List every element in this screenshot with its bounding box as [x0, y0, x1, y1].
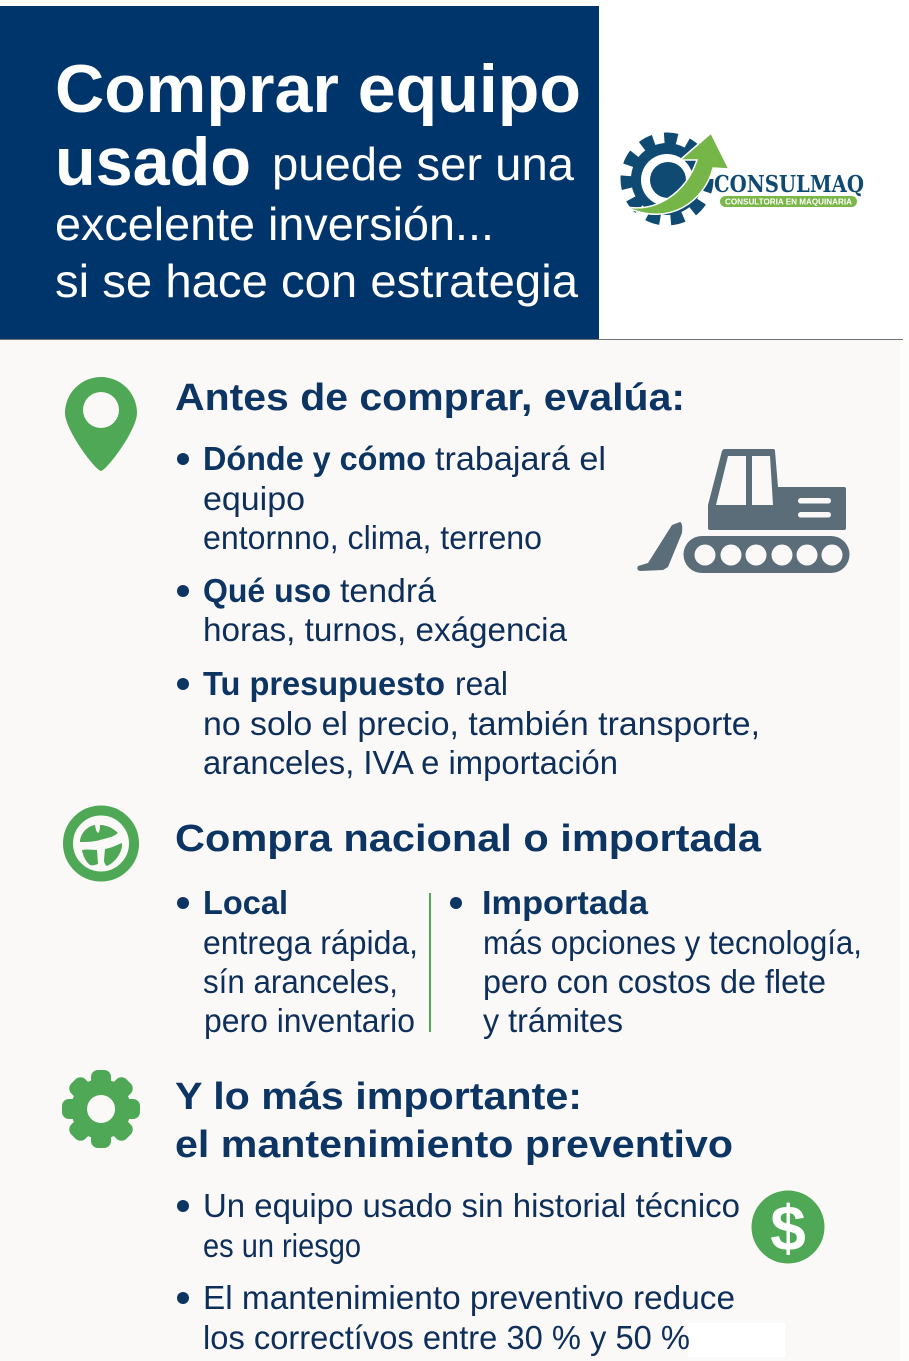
- icon: steering wheel: [68, 810, 134, 876]
- bullet: presupuesto: Tu presupuesto: [203, 665, 445, 702]
- bullet: que uso: Qué uso: [203, 572, 331, 609]
- bullet: reduccion de correctivos: los correctívos entre 30 % y 50 %: [203, 1319, 690, 1356]
- column: local: entrega rápida,: [203, 924, 418, 961]
- title: usado: [55, 124, 251, 200]
- bullet: donde y como: trabajará el: [435, 440, 606, 477]
- section: antes de comprar: [65, 377, 850, 781]
- section: mantenimiento preventivo: [62, 1070, 824, 1357]
- title: Comprar equipo: [55, 51, 581, 127]
- column: local: Local: [203, 884, 288, 921]
- icon: dollar coin: [752, 1190, 824, 1264]
- bullet: historial tecnico: es un riesgo: [203, 1227, 361, 1264]
- title: si se hace con estrategia: [55, 255, 578, 307]
- column: local: [177, 884, 418, 1039]
- bullet: reduccion de correctivos: El mantenimiento preventivo reduce: [203, 1279, 735, 1316]
- heading: compra nacional o importada: Compra nacional o importada: [175, 818, 762, 860]
- bullet: presupuesto: real: [455, 665, 508, 702]
- bullet: donde y como: Dónde y cómo: [203, 440, 426, 477]
- column: local: sín aranceles,: [203, 963, 398, 1000]
- bullet: historial tecnico: [177, 1187, 740, 1264]
- icon: location pin: [65, 377, 137, 471]
- logo wordmark: CONSULMAQ: [714, 171, 864, 198]
- column: importada: Importada: [482, 884, 649, 921]
- column: importada: más opciones y tecnología,: [483, 924, 862, 961]
- heading: mantenimiento preventivo: [175, 1076, 733, 1166]
- content background panel: [0, 340, 909, 1361]
- heading: antes de comprar: Antes de comprar, evalúa:: [175, 377, 685, 419]
- bullet: reduccion de correctivos: [177, 1279, 785, 1357]
- icon: dollar coin: $: [770, 1192, 806, 1264]
- column: importada: y trámites: [483, 1002, 623, 1039]
- bullet: presupuesto: [177, 665, 760, 781]
- heading: mantenimiento preventivo: Y lo más importante:: [175, 1076, 582, 1118]
- bullet: que uso: [177, 572, 568, 648]
- heading: mantenimiento preventivo: el mantenimiento preventivo: [175, 1124, 733, 1166]
- column: importada: pero con costos de flete: [483, 963, 826, 1000]
- bullet: que uso: horas, turnos, exágencia: [203, 611, 568, 648]
- icon: bulldozer: [637, 449, 850, 573]
- column: local: pero inventario: [204, 1002, 415, 1039]
- bullet: donde y como: equipo: [203, 480, 305, 517]
- title: excelente inversión...: [55, 198, 494, 250]
- logo arrow: [626, 133, 729, 214]
- title: puede ser una: [272, 138, 574, 190]
- logo tagline pill: CONSULTORIA EN MAQUINARIA: [725, 196, 852, 206]
- bullet: donde y como: entornno, clima, terreno: [203, 519, 542, 556]
- bullet: historial tecnico: Un equipo usado sin historial técnico: [203, 1187, 740, 1224]
- bullet: presupuesto: aranceles, IVA e importación: [203, 744, 618, 781]
- section: compra nacional o importada: [68, 810, 862, 1039]
- logo gear: [626, 138, 708, 220]
- title: [55, 51, 581, 307]
- header panel: [0, 6, 599, 339]
- icon: gear: [62, 1070, 140, 1148]
- bullet: que uso: tendrá: [340, 572, 437, 609]
- logo: Consulmaq: [626, 133, 864, 220]
- column: importada: [450, 884, 862, 1039]
- bullet: presupuesto: no solo el precio, también transporte,: [203, 705, 760, 742]
- bullet: donde y como: [177, 440, 606, 556]
